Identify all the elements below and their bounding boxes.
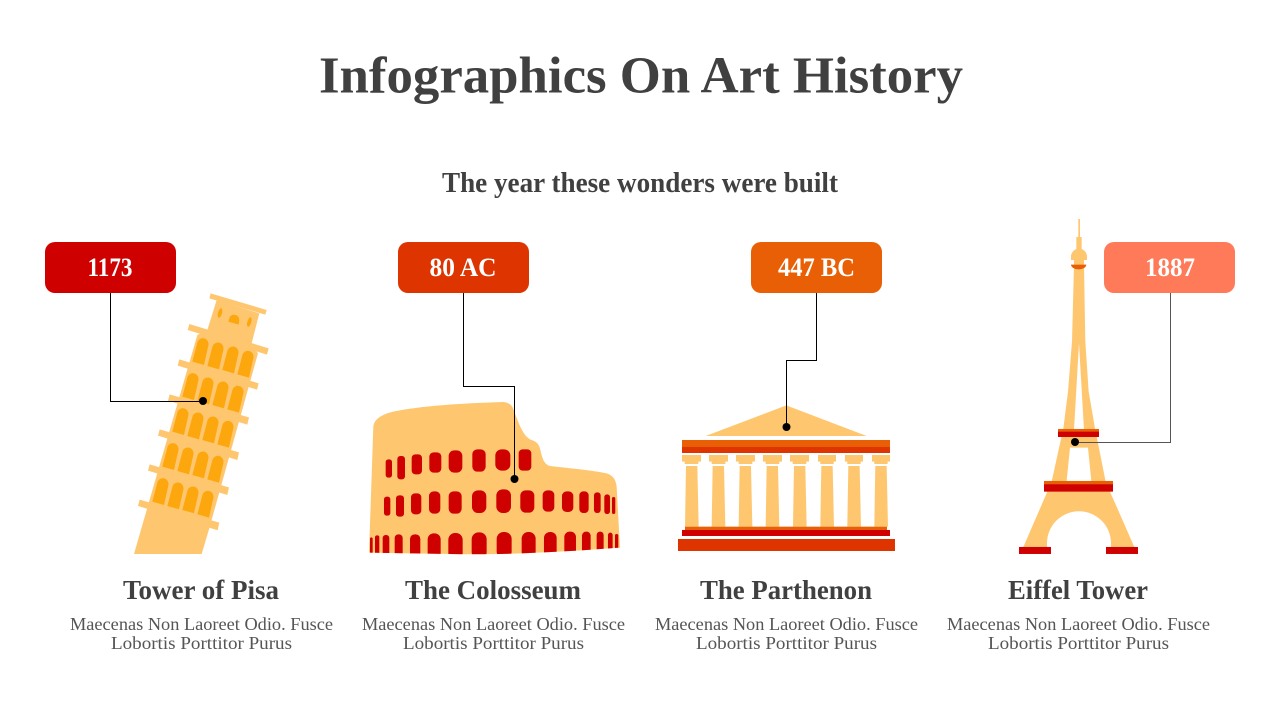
subtitle: The year these wonders were built (442, 168, 839, 199)
callout: 447 BC: 447 BC (778, 253, 855, 282)
text block: Tower of Pisa: Tower of Pisa (123, 575, 279, 605)
icon: Parthenon (678, 405, 895, 551)
callout: 1887 (1071, 242, 1235, 446)
callout: 80 AC: 80 AC (430, 253, 496, 282)
icon: Colosseum (369, 402, 620, 561)
text block: The Colosseum (362, 575, 625, 653)
text block: Tower of Pisa: Maecenas Non Laoreet Odio. Fusce (70, 614, 333, 634)
text block: Tower of Pisa: Lobortis Porttitor Purus (111, 633, 292, 653)
callout: 1887: 1887 (1145, 253, 1195, 282)
title: Infographics On Art History (319, 48, 963, 104)
text block: Tower of Pisa (70, 575, 333, 653)
text block: Eiffel Tower: Eiffel Tower (1008, 575, 1148, 605)
callout: 80 AC (398, 242, 529, 483)
text block: Eiffel Tower (947, 575, 1210, 653)
text block: The Parthenon: Maecenas Non Laoreet Odio. Fusce (655, 614, 918, 634)
text block: The Colosseum: Lobortis Porttitor Purus (403, 633, 584, 653)
text block: The Parthenon: The Parthenon (700, 575, 872, 605)
text block: The Colosseum: The Colosseum (405, 575, 582, 605)
text block: The Parthenon (655, 575, 918, 653)
text block: The Parthenon: Lobortis Porttitor Purus (696, 633, 877, 653)
text block: The Colosseum: Maecenas Non Laoreet Odio. Fusce (362, 614, 625, 634)
callout: 1173: 1173 (88, 253, 132, 282)
callout: 1173 (45, 242, 207, 405)
icon: Eiffel Tower (1019, 219, 1138, 554)
text block: Eiffel Tower: Lobortis Porttitor Purus (988, 633, 1169, 653)
text block: Eiffel Tower: Maecenas Non Laoreet Odio. Fusce (947, 614, 1210, 634)
callout: 447 BC (751, 242, 882, 431)
icon: Tower of Pisa (134, 293, 269, 554)
